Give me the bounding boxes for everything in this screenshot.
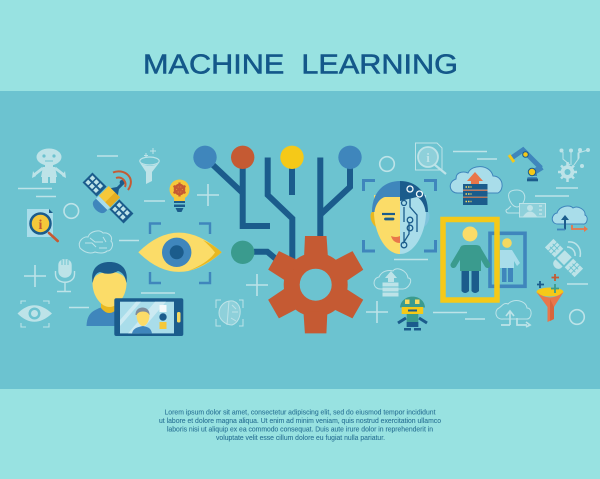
- icon: light bulb with gear: [170, 180, 190, 212]
- body text: [159, 408, 441, 442]
- plus signs: [24, 184, 388, 323]
- phone: [114, 298, 183, 336]
- decorative dashes: [18, 152, 588, 319]
- icon: gear network outline: [558, 148, 590, 182]
- body text: voluptate velit esse cillum dolore eu fugiat nulla pariatur.: [216, 433, 385, 442]
- icon: small robot: [398, 297, 427, 330]
- small circles: [64, 157, 584, 324]
- icon: robot arm: [509, 150, 542, 181]
- icon: funnel outline: [140, 148, 159, 184]
- icon: satellite: [75, 161, 145, 231]
- icon: large eye: [138, 224, 222, 283]
- icon: person with photo outline: [506, 190, 546, 217]
- icon: microphone outline: [56, 259, 74, 292]
- icon: info document outline: [416, 143, 446, 174]
- icon: robot outline top left: [32, 148, 66, 183]
- icon: face scan outline: [216, 300, 243, 326]
- icon: colourful funnel: [536, 274, 564, 322]
- body text: Lorem ipsum dolor sit amet, consectetur adipiscing elit, sed do eiusmod tempor incididunt: [164, 408, 436, 416]
- green person: [454, 226, 488, 293]
- central panel background: [0, 91, 600, 389]
- icon: info document with magnifier: [27, 209, 58, 241]
- icon: brain circuit outline: [79, 231, 112, 253]
- icon: person with phone: [86, 262, 183, 336]
- icon: gear: [267, 236, 364, 333]
- icon: cloud upload small: [552, 206, 588, 232]
- body text: ut labore et dolore magna aliqua. Ut enim ad minim veniam, quis nostrud exercitation ullamco: [159, 416, 441, 425]
- body text: laboris nisi ut aliquip ex ea commodo consequat. Duis aute irure dolor in reprehenderit in: [167, 424, 433, 434]
- title: MACHINE LEARNING: [143, 48, 458, 79]
- icon: info document outline: i: [426, 150, 430, 165]
- icon: cloud with server: [450, 167, 502, 205]
- icon: satellite outline: [540, 239, 583, 282]
- icon: person in yellow frame: [443, 220, 525, 300]
- footer band: [0, 389, 600, 479]
- icon: cloud server outline: [374, 269, 411, 296]
- blue frame: [490, 233, 525, 286]
- header band: [0, 0, 600, 91]
- tree connector lines: [213, 157, 350, 262]
- icon: eye scan outline: [18, 301, 52, 327]
- icon: cloud arrows outline: [496, 301, 531, 327]
- node circles: [193, 146, 362, 264]
- yellow frame: [443, 220, 497, 300]
- icon: info document with magnifier: i: [39, 218, 43, 233]
- light person: [500, 238, 520, 282]
- icon: cyborg face: [364, 180, 436, 254]
